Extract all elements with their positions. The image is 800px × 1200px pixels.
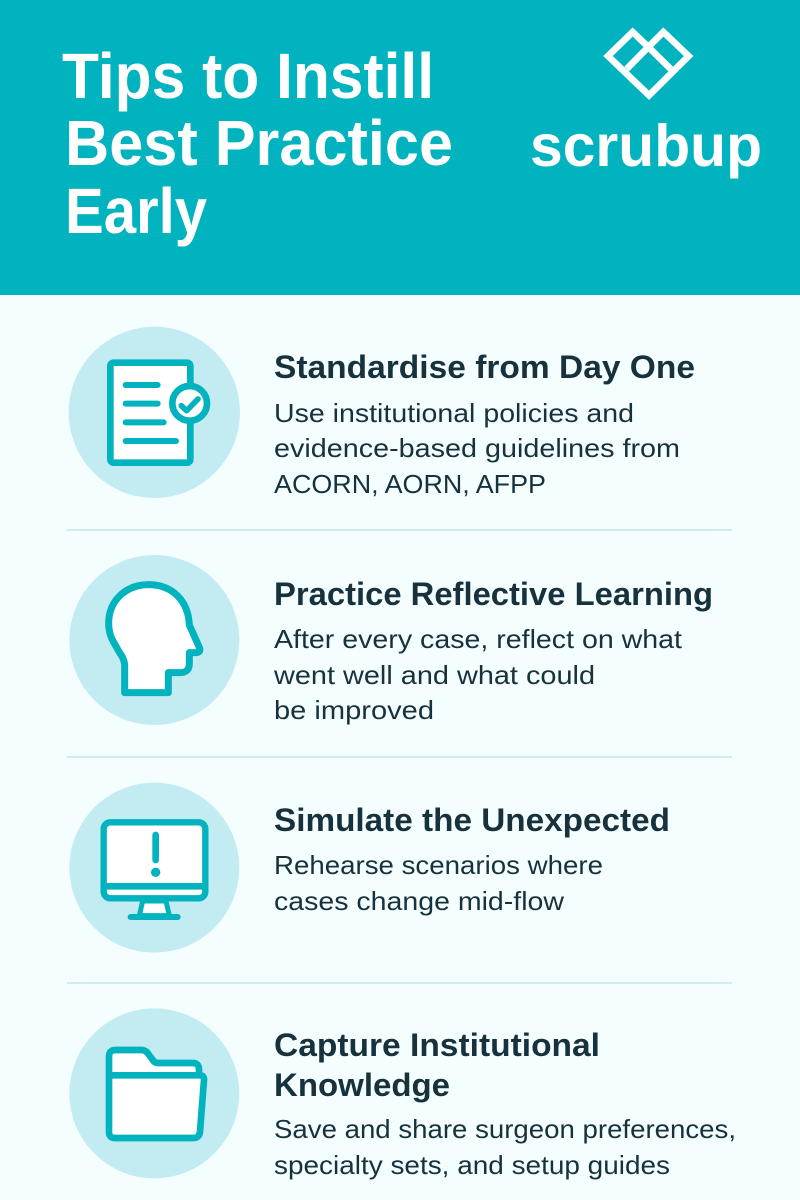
heading: Knowledge bbox=[274, 1067, 450, 1103]
logo: scrubup: scrubup bbox=[530, 113, 762, 179]
title: Best Practice bbox=[65, 107, 453, 179]
description: specialty sets, and setup guides bbox=[274, 1150, 670, 1180]
icon: head profile bbox=[69, 555, 239, 725]
panel: simulate the unexpected bbox=[69, 783, 670, 953]
logo: scrubup bbox=[530, 32, 762, 179]
description: went well and what could bbox=[273, 660, 595, 690]
panel: standardise from day one bbox=[69, 327, 695, 499]
description bbox=[274, 850, 603, 916]
icon: folder bbox=[69, 1008, 239, 1178]
description bbox=[274, 398, 680, 499]
heading: Practice Reflective Learning bbox=[274, 576, 713, 612]
description: Rehearse scenarios where bbox=[274, 850, 603, 880]
header band bbox=[0, 0, 800, 295]
title: Tips to Instill bbox=[62, 40, 434, 112]
title: Early bbox=[65, 175, 207, 247]
icon: monitor with alert bbox=[69, 783, 239, 953]
heading: Capture Institutional bbox=[274, 1027, 600, 1063]
heading bbox=[274, 1027, 600, 1103]
panel: practice reflective learning bbox=[69, 555, 713, 725]
description: cases change mid-flow bbox=[274, 886, 564, 916]
description: evidence-based guidelines from bbox=[274, 433, 680, 463]
description: be improved bbox=[274, 695, 434, 725]
title bbox=[62, 40, 453, 247]
panel: capture institutional knowledge bbox=[69, 1008, 736, 1180]
description: After every case, reflect on what bbox=[274, 624, 683, 654]
icon: document with check bbox=[69, 327, 240, 498]
description: Save and share surgeon preferences, bbox=[274, 1114, 736, 1144]
description: Use institutional policies and bbox=[274, 398, 634, 428]
heading: Standardise from Day One bbox=[274, 349, 695, 385]
description bbox=[274, 1114, 736, 1180]
heading: Simulate the Unexpected bbox=[274, 802, 670, 838]
description: ACORN, AORN, AFPP bbox=[274, 469, 546, 499]
description bbox=[273, 624, 683, 725]
